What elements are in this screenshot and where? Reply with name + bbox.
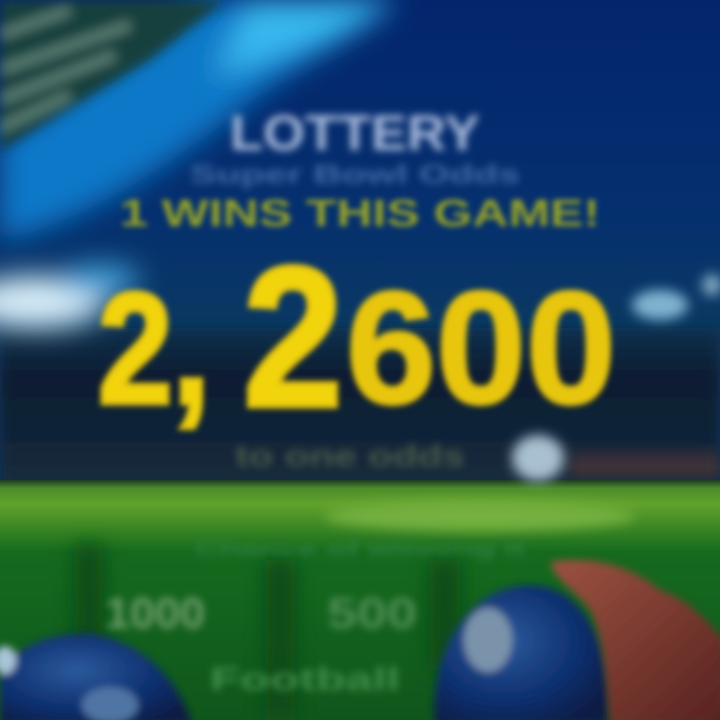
title: LOTTERY: [230, 105, 480, 161]
helmet: bottom left: [0, 634, 192, 720]
big number: 2,: [98, 261, 210, 437]
icon: football glow: [512, 435, 564, 481]
background: cyan light streak: [0, 0, 400, 240]
cloud: right: [632, 274, 720, 320]
background: red crowd tint: [570, 454, 720, 478]
big number: 600: [346, 258, 616, 437]
field text: footer: Football: [210, 661, 400, 697]
field text: right value: 500: [327, 589, 417, 638]
field text: top row: Chance of winning it: [195, 539, 525, 559]
hand: [550, 560, 720, 720]
yellow headline: 1 WINS THIS GAME!: [120, 193, 600, 235]
cloud: left: [0, 264, 140, 328]
field highlight stripe: [325, 501, 635, 531]
big number: 2: [243, 226, 343, 449]
subtitle: Super Bowl Odds: [190, 159, 520, 189]
field text: left value: 1000: [105, 589, 205, 638]
green field: [0, 480, 720, 720]
helmet: bottom right: [434, 585, 609, 720]
big number: [98, 226, 616, 449]
small caption under number: to one odds: [235, 440, 465, 473]
background: dark stadium stands: [0, 328, 720, 488]
field shadow stripes: [75, 545, 460, 720]
background: stadium floodlights: [0, 0, 225, 150]
